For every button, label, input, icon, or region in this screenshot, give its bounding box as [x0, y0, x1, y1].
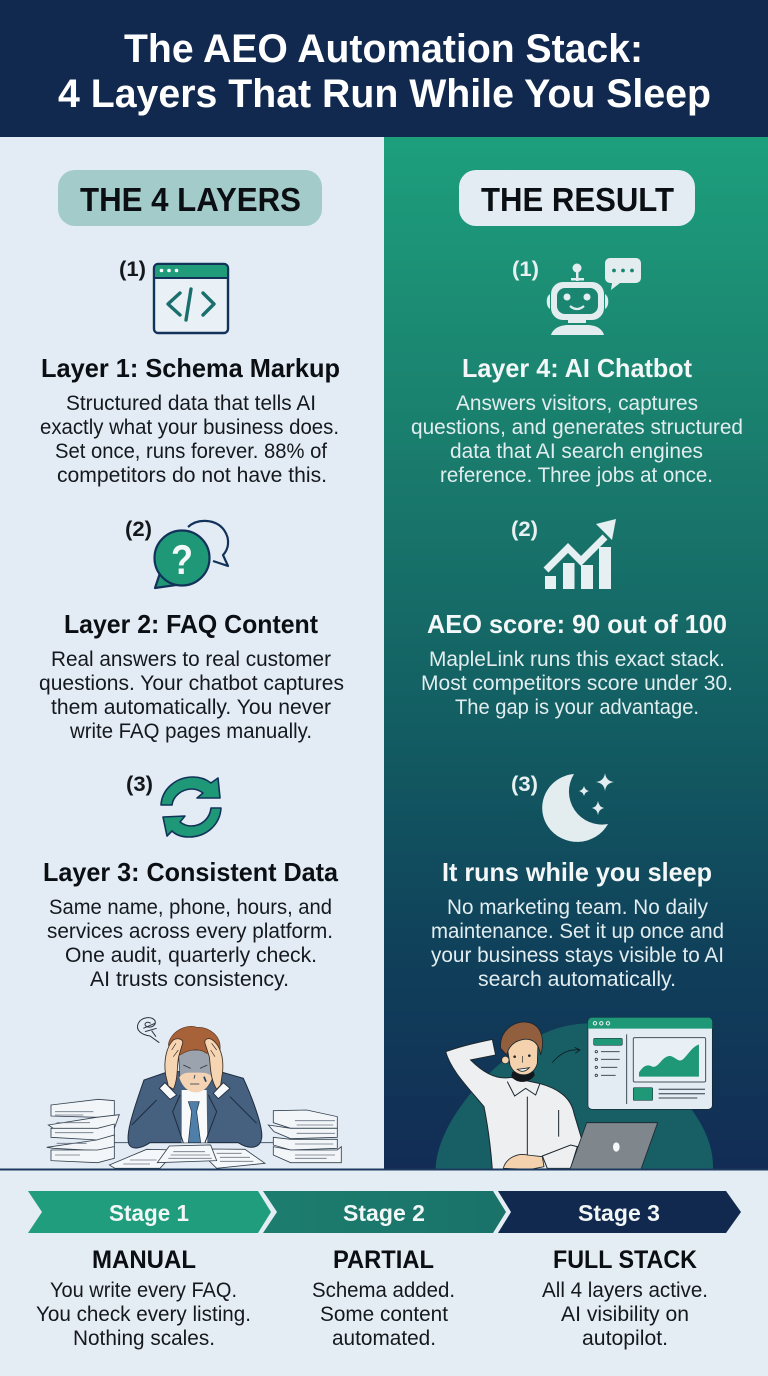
stage 3 text: FULL STACK	[553, 1246, 697, 1274]
icon: question bubbles: ?	[171, 536, 193, 583]
icon: code window	[154, 264, 228, 333]
panel: right background	[384, 137, 768, 1170]
sleep text: search automatically.	[478, 968, 676, 991]
stage 1 text: Nothing scales.	[73, 1327, 215, 1350]
stage 2 text	[312, 1246, 455, 1350]
stress scribble	[137, 1018, 159, 1043]
number 1: (1)	[512, 258, 539, 281]
number 3: (3)	[511, 773, 538, 796]
icon: robot with speech bubble	[547, 258, 641, 335]
aeo score text: The gap is your advantage.	[455, 696, 699, 719]
heading pill: the result: THE RESULT	[481, 181, 674, 218]
divider line	[0, 1168, 768, 1170]
title banner: 4 Layers That Run While You Sleep	[58, 72, 711, 116]
person shirt	[446, 1039, 584, 1169]
hand	[503, 1154, 544, 1169]
center papers	[109, 1145, 265, 1168]
layer 2 text: Layer 2: FAQ Content	[64, 609, 318, 639]
layer 4 text: questions, and generates structured	[411, 416, 743, 439]
teal blob	[436, 1023, 713, 1170]
paper stacks	[47, 1099, 341, 1163]
suit	[128, 1072, 262, 1148]
stage 2 text: Schema added.	[312, 1279, 455, 1302]
sleep text: your business stays visible to AI	[431, 944, 724, 967]
face	[178, 1050, 213, 1091]
aeo score text: MapleLink runs this exact stack.	[429, 648, 725, 671]
stage 1 arrow: Stage 1	[109, 1200, 189, 1226]
layer 2 text: them automatically. You never	[51, 696, 331, 719]
stages	[28, 1191, 741, 1350]
layer 4 text	[411, 353, 743, 487]
layer 2 text: Real answers to real customer	[51, 648, 331, 671]
stage 1 text	[36, 1246, 251, 1350]
layer 1 text: competitors do not have this.	[57, 464, 327, 487]
stage 2 arrow: Stage 2	[343, 1200, 425, 1226]
heading pill: the 4 layers	[58, 170, 322, 226]
stage 1 text: You write every FAQ.	[50, 1279, 237, 1302]
stage 1 text: You check every listing.	[36, 1303, 251, 1326]
cuffs	[159, 1083, 230, 1099]
hair	[168, 1026, 220, 1055]
stage 1 text: MANUAL	[92, 1246, 196, 1274]
stage 2 text: automated.	[332, 1327, 436, 1350]
illustration: relaxed man with laptop and dashboard	[436, 1018, 713, 1170]
dashboard window	[588, 1018, 712, 1109]
layer 2 text: questions. Your chatbot captures	[39, 672, 344, 695]
layer 3 text	[43, 857, 339, 991]
icon: growth chart	[545, 519, 616, 589]
number 2: (2)	[511, 518, 538, 541]
icon: sync arrows	[161, 777, 221, 837]
layer 4 text: reference. Three jobs at once.	[440, 464, 713, 487]
layer 4 text: Answers visitors, captures	[456, 392, 698, 415]
layer 1 text	[40, 353, 340, 487]
stage 2 text: PARTIAL	[333, 1246, 434, 1274]
aeo score text: AEO score: 90 out of 100	[427, 609, 727, 639]
stage 3 text: autopilot.	[582, 1327, 668, 1350]
number 3: (3)	[126, 773, 153, 796]
layer 3 text: Layer 3: Consistent Data	[43, 857, 339, 887]
sleep text: No marketing team. No daily	[447, 896, 708, 919]
desk line	[113, 1141, 275, 1144]
sleep text: It runs while you sleep	[442, 857, 712, 887]
stage 3 text	[542, 1246, 708, 1350]
layer 1 text: exactly what your business does.	[40, 416, 339, 439]
layer 3 text: AI trusts consistency.	[90, 968, 289, 991]
stage 3 arrow	[498, 1191, 741, 1233]
number 1: (1)	[119, 258, 146, 281]
panel: the 4 layers	[39, 170, 344, 1168]
aeo score text	[421, 609, 733, 719]
hands	[165, 1039, 183, 1089]
layer 2 text: write FAQ pages manually.	[69, 720, 312, 743]
panel: stages background	[0, 1170, 768, 1376]
small arrow	[552, 1047, 580, 1063]
sleep text	[431, 857, 724, 991]
layer 3 text: One audit, quarterly check.	[65, 944, 317, 967]
sleep text: maintenance. Set it up once and	[431, 920, 724, 943]
layer 1 text: Set once, runs forever. 88% of	[55, 440, 327, 463]
head	[511, 1072, 535, 1082]
icon: question bubbles	[154, 521, 228, 588]
laptop	[570, 1123, 658, 1169]
layer 4 text: Layer 4: AI Chatbot	[462, 353, 692, 383]
layer 1 text: Structured data that tells AI	[66, 392, 316, 415]
layer 2 text	[39, 609, 344, 743]
layer 3 text: Same name, phone, hours, and	[49, 896, 332, 919]
title banner: The AEO Automation Stack:	[124, 27, 643, 71]
heading pill: the result	[459, 170, 695, 226]
stage 3 text: AI visibility on	[561, 1303, 689, 1326]
panel: left background	[0, 137, 384, 1170]
layer 3 text: services across every platform.	[47, 920, 333, 943]
stage 2 arrow	[263, 1191, 506, 1233]
panel: the result	[411, 170, 743, 1170]
layer 4 text: data that AI search engines	[450, 440, 703, 463]
aeo score text: Most competitors score under 30.	[421, 672, 733, 695]
heading pill: the 4 layers: THE 4 LAYERS	[80, 181, 301, 218]
stage 3 arrow: Stage 3	[578, 1200, 660, 1226]
number 2: (2)	[125, 518, 152, 541]
illustration: stressed man at desk	[47, 1018, 341, 1168]
layer 1 text: Layer 1: Schema Markup	[41, 353, 340, 383]
stage 2 text: Some content	[320, 1303, 448, 1326]
stage 1 arrow	[28, 1191, 271, 1233]
title banner	[0, 0, 768, 137]
icon: moon and stars	[542, 773, 614, 842]
stage 3 text: All 4 layers active.	[542, 1279, 708, 1302]
